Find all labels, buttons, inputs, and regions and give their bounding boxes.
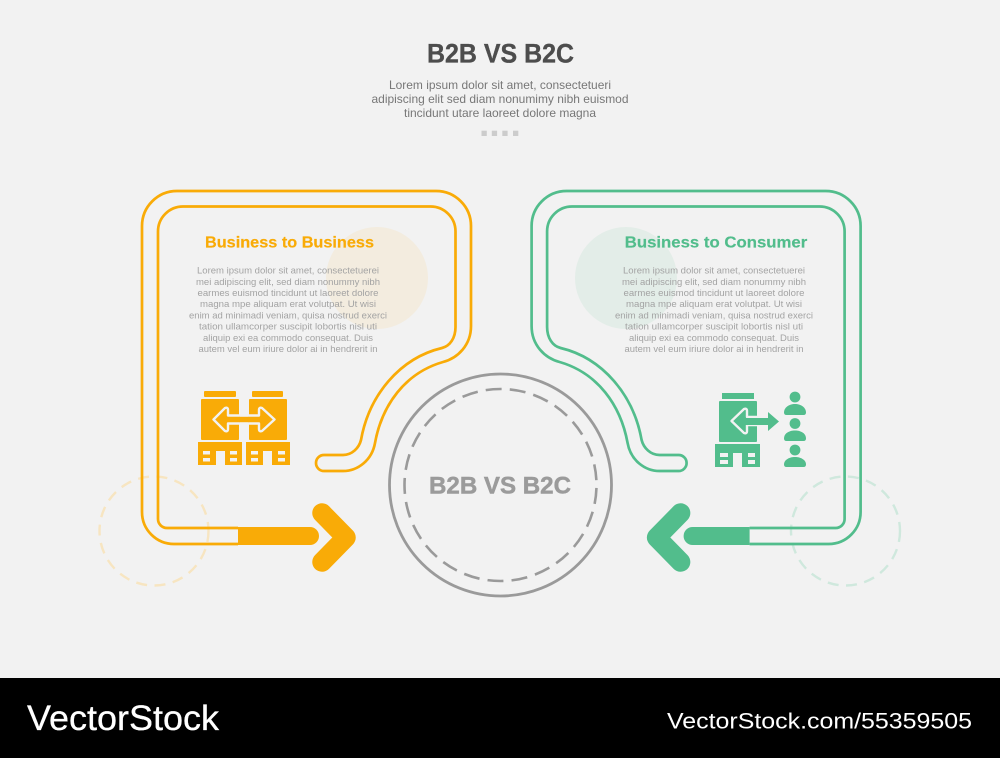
text block: right body: Lorem ipsum dolor sit amet, consectetuerei (623, 264, 805, 276)
text block: left body: magna mpe aliquam erat volutpat. Ut wisi (200, 298, 376, 309)
text block: right body: aliquip exi ea commodo consequat. Duis (629, 332, 799, 343)
dashed circle: right (791, 476, 900, 586)
text block: left body: enim ad minimadi veniam, quisa nostrud exerci (189, 310, 387, 320)
heading: business to consumer: Business to Consumer (625, 234, 807, 252)
center circle badge (390, 374, 612, 596)
text block: right body: enim ad minimadi veniam, quisa nostrud exerci (615, 310, 813, 320)
text block: left body: earmes euismod tincidunt ut laoreet dolore (198, 287, 378, 298)
subtitle text block: Lorem ipsum dolor sit amet, consectetueri (389, 78, 611, 92)
heading: business to business: Business to Business (205, 234, 374, 252)
center label: B2B VS B2C (429, 472, 571, 500)
footer logo: VectorStock (27, 698, 219, 738)
text block: left body: Lorem ipsum dolor sit amet, consectetuerei (197, 264, 379, 276)
subtitle text block: adipiscing elit sed diam nonumimy nibh euismod (372, 92, 628, 106)
text block: right body (615, 264, 813, 354)
text block: left body: mei adipiscing elit, sed diam nonummy nibh (196, 276, 380, 287)
footer url: VectorStock.com/55359505 (667, 708, 972, 734)
subtitle text block: tincidunt utare laoreet dolore magna (404, 106, 596, 120)
outline: left track (142, 191, 471, 544)
text block: left body: tation ullamcorper suscipit lobortis nisl uti (199, 321, 377, 332)
text block: right body: autem vel eum iriure dolor ai in hendrerit in (624, 343, 804, 354)
title dots (482, 131, 518, 136)
icon: warehouse to consumers (715, 392, 806, 467)
icon: two warehouses exchange (198, 391, 290, 465)
text block: right body: mei adipiscing elit, sed diam nonummy nibh (622, 276, 806, 287)
outline: right track (532, 191, 861, 544)
arrow: right (657, 513, 750, 562)
dashed circle: left (100, 476, 208, 586)
subtitle text block (372, 78, 628, 120)
arrow: left (238, 513, 346, 562)
footer bar (0, 678, 1000, 758)
panel: business to business (100, 191, 471, 586)
text block: left body (189, 264, 387, 354)
soft circle: right (575, 227, 677, 329)
soft circle: left (326, 227, 428, 329)
text block: right body: tation ullamcorper suscipit lobortis nisl uti (625, 321, 803, 332)
panel: business to consumer (532, 191, 900, 586)
text block: left body: autem vel eum iriure dolor ai in hendrerit in (198, 343, 378, 354)
text block: left body: aliquip exi ea commodo consequat. Duis (203, 332, 373, 343)
text block: right body: magna mpe aliquam erat volutpat. Ut wisi (626, 298, 802, 309)
text block: right body: earmes euismod tincidunt ut laoreet dolore (624, 287, 804, 298)
title: B2B VS B2C (427, 38, 574, 68)
